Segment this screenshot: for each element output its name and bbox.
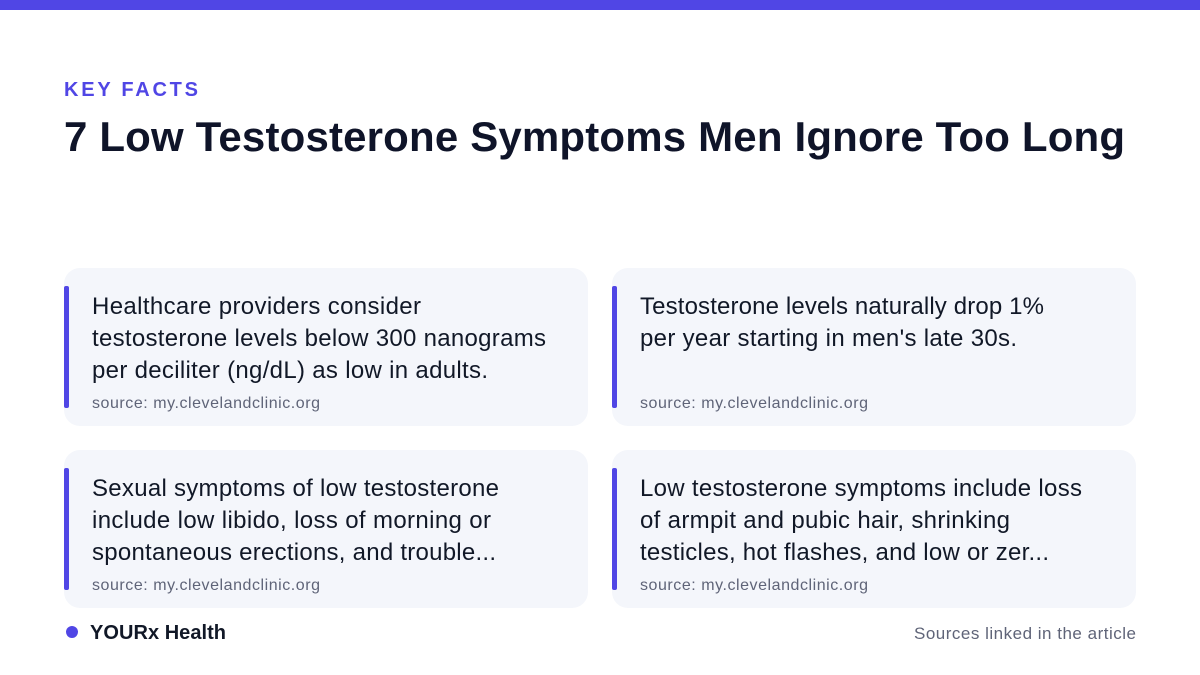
panel: fact 2: source: my.clevelandclinic.org xyxy=(640,395,868,412)
panel: fact 3: source: my.clevelandclinic.org xyxy=(92,577,320,594)
top accent bar xyxy=(0,0,1200,10)
panel: fact 1: per deciliter (ng/dL) as low in adults. xyxy=(92,357,488,384)
panel: fact 4: of armpit and pubic hair, shrinking xyxy=(640,507,1010,534)
sources note: Sources linked in the article xyxy=(914,624,1136,643)
panel: fact 3: Sexual symptoms of low testosterone xyxy=(92,475,499,502)
panel: fact 1: source: my.clevelandclinic.org xyxy=(92,395,320,412)
panel: fact 1: testosterone levels below 300 nanograms xyxy=(92,325,546,352)
panel: fact 4: source: my.clevelandclinic.org xyxy=(640,577,868,594)
panel: fact 1 xyxy=(64,268,588,426)
panel: fact 4: Low testosterone symptoms include loss xyxy=(640,475,1082,502)
panel: fact 4 xyxy=(612,450,1136,608)
panel: fact 3: spontaneous erections, and trouble... xyxy=(92,539,496,566)
panel: fact 3 xyxy=(64,450,588,608)
panel: fact 2: Testosterone levels naturally drop 1% xyxy=(640,293,1044,320)
brand footer: YOURx Health xyxy=(90,622,226,644)
panel: fact 1: Healthcare providers consider xyxy=(92,293,421,320)
panel: fact 2: per year starting in men's late 30s. xyxy=(640,325,1017,352)
panel: fact 3: include low libido, loss of morning or xyxy=(92,507,491,534)
title: 7 Low Testosterone Symptoms Men Ignore Too Long xyxy=(64,113,1125,160)
panel: fact 2 xyxy=(612,268,1136,426)
eyebrow label: KEY FACTS xyxy=(64,79,198,101)
panel: fact 4: testicles, hot flashes, and low or zer... xyxy=(640,539,1049,566)
